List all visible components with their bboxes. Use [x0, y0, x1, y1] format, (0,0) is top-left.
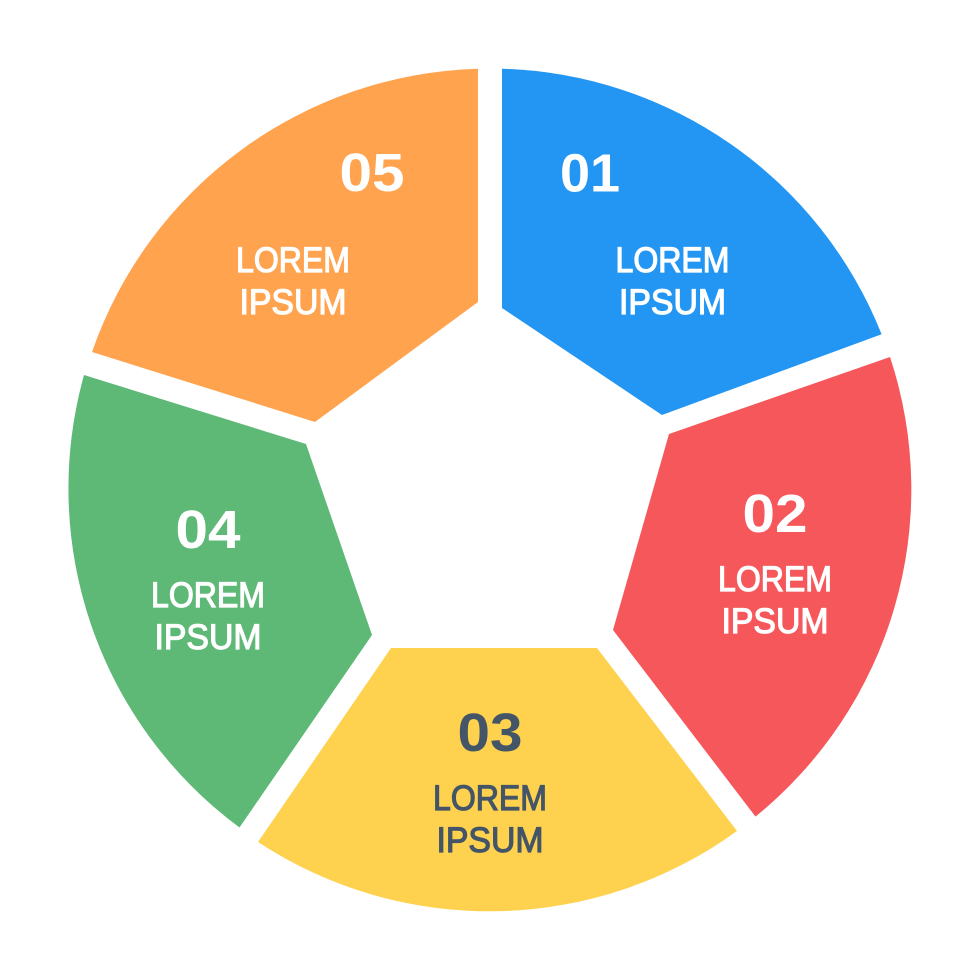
label 02 — [718, 560, 832, 641]
segment 02: red — [613, 357, 911, 817]
segment 04: green — [68, 375, 372, 828]
segment 05: orange — [92, 69, 478, 422]
label 05: IPSUM — [240, 283, 346, 322]
segment 03: yellow — [258, 648, 737, 911]
label 01 — [616, 241, 730, 322]
number 02: 02 — [742, 484, 808, 544]
label 05 — [236, 241, 350, 322]
label 02: IPSUM — [722, 602, 828, 641]
number 04: 04 — [176, 500, 240, 560]
label 03 — [433, 779, 547, 860]
number 03: 03 — [458, 703, 522, 763]
label 03: LOREM — [433, 779, 547, 818]
label 01: IPSUM — [619, 283, 726, 322]
number 05: 05 — [340, 143, 404, 203]
label 04 — [151, 576, 265, 657]
segment 01: blue — [502, 69, 882, 415]
number 01: 01 — [560, 144, 620, 204]
label 02: LOREM — [718, 560, 832, 599]
label 01: LOREM — [616, 241, 730, 280]
label 05: LOREM — [236, 241, 350, 280]
label 04: LOREM — [151, 576, 265, 615]
label 03: IPSUM — [436, 821, 544, 860]
label 04: IPSUM — [154, 618, 262, 657]
